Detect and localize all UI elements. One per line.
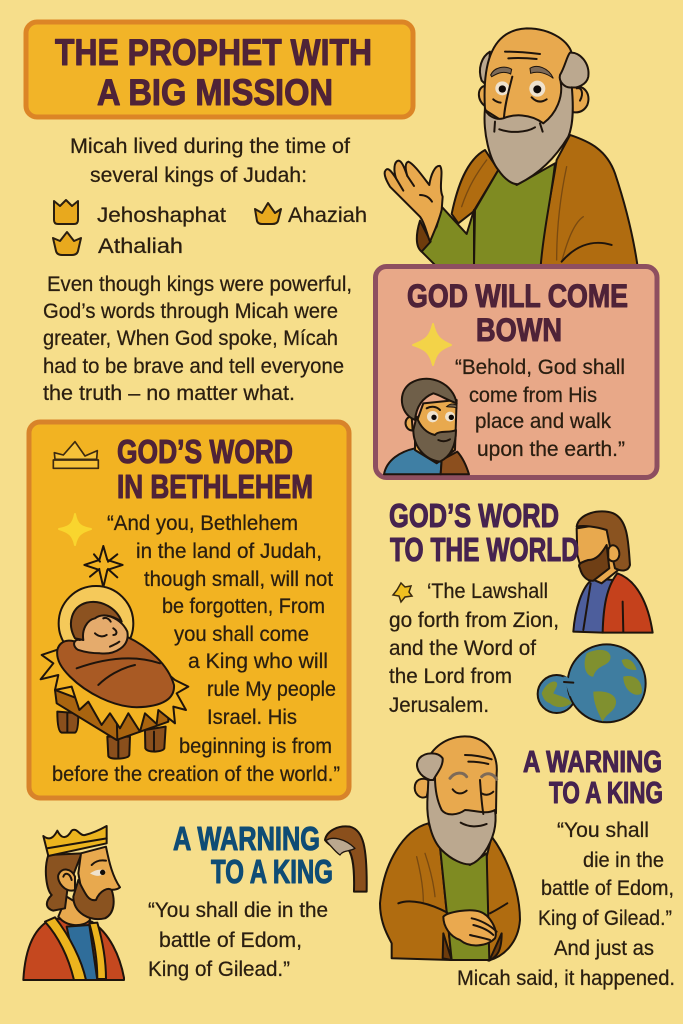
king name: Ahaziah: Ahaziah <box>288 204 367 227</box>
paragraph: God's words were greater <box>43 273 352 405</box>
quote text <box>52 512 340 786</box>
heading: GOD’S WORD <box>389 497 559 534</box>
quote text: battle of Edom, <box>159 929 302 952</box>
quote text: before the creation of the world.” <box>52 763 340 786</box>
paragraph: God's words were greater: Even though kings were powerful, <box>47 273 352 296</box>
quote text: come from His <box>469 384 597 407</box>
quote text: beginning is from <box>179 735 332 758</box>
heading <box>173 820 333 890</box>
quote text: Micah said, it happened. <box>457 967 675 990</box>
quote text: in the land of Judah, <box>136 540 322 563</box>
icon: shepherd staff <box>325 826 367 892</box>
quote text: a King who will <box>188 650 328 673</box>
quote text: battle of Edom, <box>541 877 674 900</box>
section: warning to a king, right <box>380 736 675 990</box>
quote text: “You shall <box>557 819 649 842</box>
section: God's word to the world <box>389 497 653 722</box>
heading: TO THE WORLD <box>390 531 579 568</box>
paragraph: God's words were greater: God’s words through Micah were <box>43 300 338 323</box>
quote text: ‘The Lawshall <box>427 580 548 603</box>
quote text: And just as <box>554 937 654 960</box>
panel: God's word in Bethlehem <box>29 422 349 798</box>
heading: God's word in Bethlehem: GOD’S WORD <box>117 433 293 470</box>
quote text: die in the <box>583 849 664 872</box>
quote text: rule My people <box>207 678 336 701</box>
icon: star of Bethlehem <box>84 546 123 587</box>
quote text: the Lord from <box>389 665 512 688</box>
illustration: king with crown <box>23 826 124 980</box>
quote text: “You shall die in the <box>148 899 328 922</box>
heading: God will come bown <box>407 278 628 348</box>
icon: sparkle <box>413 324 451 365</box>
heading: God will come bown: GOD WILL COME <box>407 278 628 314</box>
icon: globe <box>538 644 646 722</box>
quote text: “Behold, God shall <box>455 356 625 379</box>
illustration: Micah with raised hand <box>385 28 638 267</box>
king name: Jehoshaphat: Jehoshaphat <box>97 204 226 227</box>
icon: crown Athaliah <box>53 232 81 255</box>
intro text: several kings of Judah: <box>90 164 307 187</box>
heading <box>523 744 663 810</box>
quote text: you shall come <box>174 623 309 646</box>
illustration: baby in manger with star <box>41 546 188 759</box>
intro text <box>70 135 350 187</box>
section: warning to a king, left <box>23 820 367 981</box>
king name: Athaliah: Athaliah <box>98 235 183 258</box>
title banner: THE PROPHET WITH <box>55 32 372 73</box>
quote text: “And you, Bethlehem <box>107 512 298 535</box>
quote text <box>455 356 625 461</box>
paragraph: God's words were greater: the truth – no matter what. <box>43 382 295 405</box>
illustration: bearded man <box>384 379 469 474</box>
quote text: and the Word of <box>389 637 536 660</box>
paragraph: God's words were greater: had to be brave and tell everyone <box>43 355 344 378</box>
quote text: go forth from Zion, <box>389 609 559 632</box>
quote text: upon the earth.” <box>477 438 625 461</box>
quote text <box>389 580 559 717</box>
heading: TO A KING <box>211 853 333 890</box>
heading <box>389 497 579 568</box>
icon: small star <box>393 583 412 602</box>
quote text <box>148 899 328 981</box>
paragraph: God's words were greater: greater, When God spoke, Mícah <box>43 327 338 350</box>
illustration: man in red cloak <box>573 511 653 633</box>
quote text: Jerusalem. <box>389 694 489 717</box>
quote text: place and walk <box>475 410 611 433</box>
quote text: though small, will not <box>144 568 333 591</box>
icon: crown Ahaziah <box>255 203 281 224</box>
illustration: Micah praying <box>380 736 520 961</box>
icon: sparkle <box>59 514 91 545</box>
title banner <box>26 22 413 117</box>
heading: God's word in Bethlehem: IN BETHLEHEM <box>117 468 313 505</box>
title banner: A BIG MISSION <box>97 72 333 113</box>
quote text <box>457 819 675 990</box>
heading: God's word in Bethlehem <box>117 433 313 505</box>
intro text: Micah lived during the time of <box>70 135 350 158</box>
quote text: King of Gilead.” <box>148 958 290 981</box>
quote text: King of Gilead.” <box>538 907 672 930</box>
heading: God will come bown: BOWN <box>476 312 562 348</box>
heading: A WARNING <box>173 820 320 857</box>
quote text: Israel. His <box>207 706 297 729</box>
panel: God will come down <box>376 266 657 478</box>
icon: crown Jehoshaphat <box>54 200 78 224</box>
list of kings <box>53 200 367 258</box>
quote text: be forgotten, From <box>162 595 325 618</box>
icon: crown outline <box>53 442 98 468</box>
